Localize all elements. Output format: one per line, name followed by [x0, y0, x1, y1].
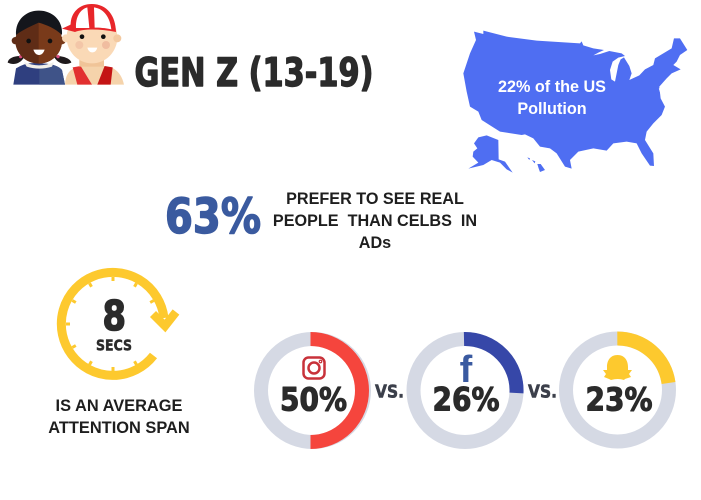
icon: Facebook: f: [460, 349, 473, 391]
icon: two teenagers: [8, 4, 124, 85]
title: GEN Z (13-19): [134, 51, 374, 96]
map: United States: [463, 31, 687, 173]
contiguous states: [463, 31, 687, 169]
timer ticks: [66, 277, 154, 371]
text: attention span: IS AN AVERAGE: [56, 397, 183, 415]
map caption: Pollution: [517, 100, 587, 118]
Hawaii: [527, 157, 545, 172]
map caption: 22% of the US: [498, 78, 606, 96]
text: prefer real people: PEOPLE THAN CELBS IN: [273, 212, 477, 230]
text: attention span: ATTENTION SPAN: [48, 419, 190, 437]
donut: Facebook 26%: [414, 339, 517, 442]
timer number: 8: [102, 292, 126, 340]
text: prefer real people: [273, 190, 477, 252]
label: vs: VS.: [528, 382, 557, 402]
timer arrow: [153, 312, 176, 326]
statistic: 63%: 63%: [165, 189, 261, 245]
Chesapeake bay: [659, 88, 663, 102]
text: prefer real people: PREFER TO SEE REAL: [286, 190, 464, 208]
map caption: [498, 78, 606, 118]
donut: Facebook 26%: 26%: [432, 380, 500, 418]
text: prefer real people: ADs: [359, 234, 391, 252]
icon: 8 second timer: [61, 272, 176, 375]
icon: Snapchat: [603, 355, 632, 380]
timer unit: SECS: [96, 336, 132, 354]
donut: Snapchat 23%: 23%: [586, 380, 652, 418]
Alaska: [468, 135, 513, 173]
boy: [62, 4, 124, 85]
girl: [8, 11, 71, 85]
timer ring: [61, 272, 164, 375]
text: attention span: [48, 397, 190, 437]
donut: Instagram 50%: [261, 339, 364, 442]
label: vs: VS.: [375, 382, 404, 402]
donut: Snapchat 23%: [566, 338, 669, 442]
donut: Instagram 50%: 50%: [280, 380, 347, 418]
icon: Instagram: [304, 358, 324, 378]
